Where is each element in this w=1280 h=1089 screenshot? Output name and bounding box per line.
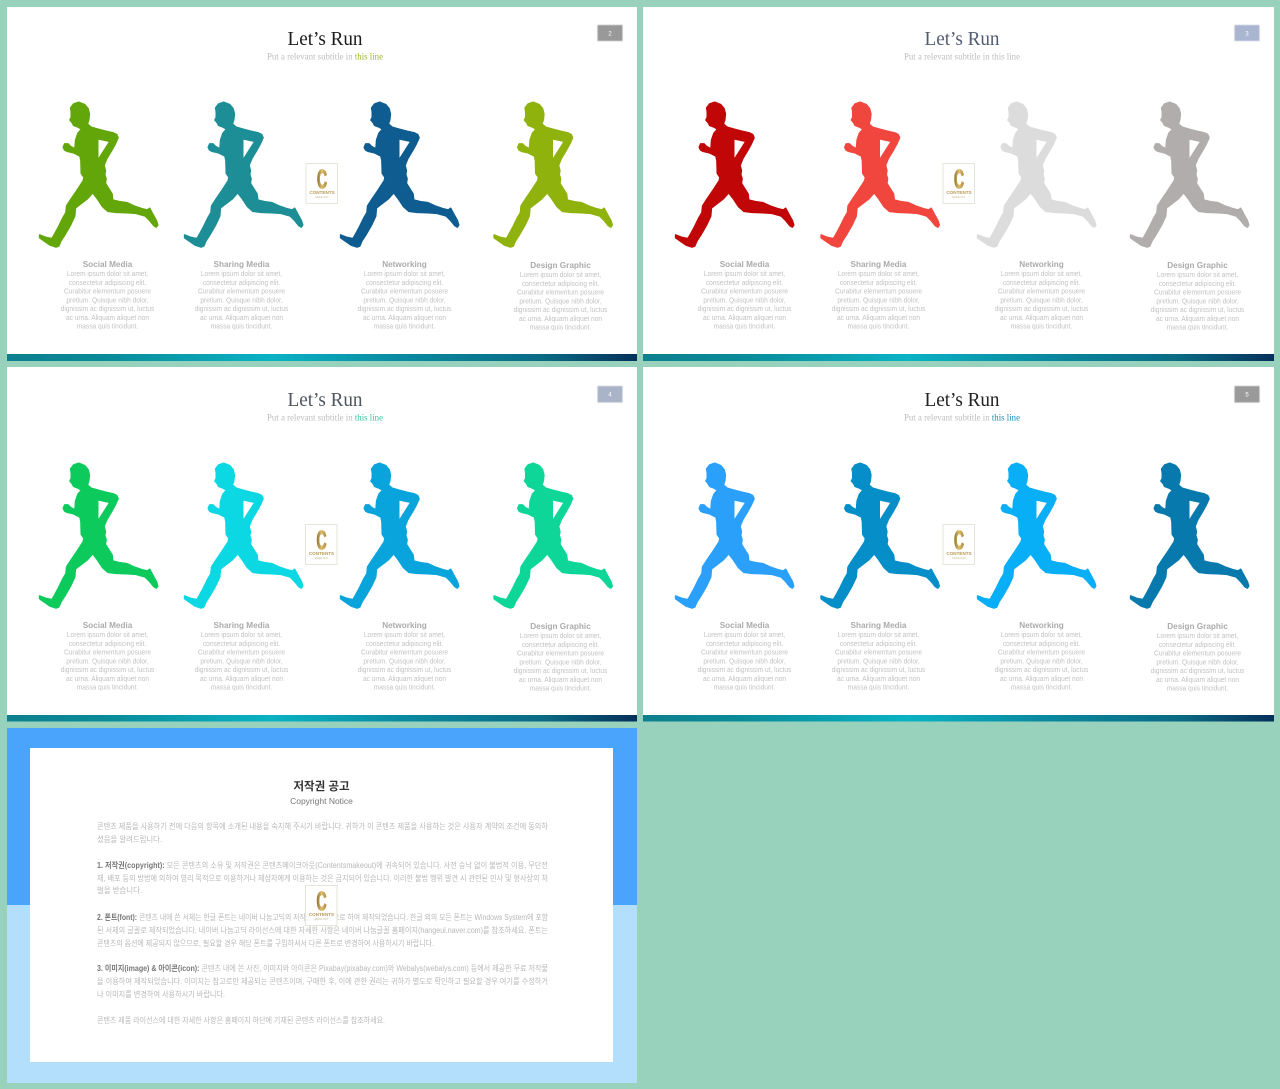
column: Design Graphic: Curabitur elementum posuere [1154, 289, 1241, 297]
logo: C [954, 164, 964, 194]
column: Sharing Media [832, 260, 926, 331]
page badge: 5 [1245, 392, 1249, 398]
logo: C [317, 164, 327, 194]
column: Design Graphic: dignissim ac dignissim ut, luctus [1151, 668, 1245, 675]
column: Sharing Media: Sharing Media [851, 621, 907, 630]
column: Social Media: pretium. Quisque nibh dolor, [66, 297, 149, 305]
column: Networking: consectetur adipiscing elit. [1003, 280, 1080, 287]
column: Social Media: massa quis tincidunt. [77, 323, 138, 331]
column: Networking: consectetur adipiscing elit. [366, 280, 443, 287]
column: Social Media: dignissim ac dignissim ut, luctus [61, 306, 155, 313]
column: Social Media: massa quis tincidunt. [714, 684, 775, 692]
column: Networking: pretium. Quisque nibh dolor, [1000, 297, 1083, 305]
column: Networking: pretium. Quisque nibh dolor, [1000, 658, 1083, 666]
column: Networking: massa quis tincidunt. [1011, 684, 1072, 692]
column: Design Graphic: pretium. Quisque nibh dolor, [1156, 298, 1239, 306]
runners [676, 102, 1249, 247]
column: Networking: Networking [1019, 260, 1064, 269]
column: Sharing Media: dignissim ac dignissim ut, luctus [195, 306, 289, 313]
column: Networking: dignissim ac dignissim ut, luctus [358, 667, 452, 674]
column: Social Media: dignissim ac dignissim ut, luctus [61, 667, 155, 674]
notice item 1 [97, 860, 548, 895]
panel: slide 3 red runners [643, 7, 1274, 361]
column: Sharing Media: Lorem ipsum dolor sit amet, [201, 271, 282, 278]
notice item 2: 콘텐츠의 옵션에 제공되지 않으므로, 필요할 경우 해당 폰트를 구입하셔서 다른 폰트로 변경하여 사용하시기 바랍니다. [97, 938, 434, 948]
column: Social Media: ac urna. Aliquam aliquet non [703, 676, 786, 683]
column: Social Media: pretium. Quisque nibh dolor, [703, 658, 786, 666]
column: Design Graphic: dignissim ac dignissim ut, luctus [1151, 307, 1245, 314]
column: Networking [995, 621, 1089, 692]
column: Design Graphic: ac urna. Aliquam aliquet non [519, 316, 602, 323]
column: Networking: Curabitur elementum posuere [998, 649, 1085, 657]
column: Networking [358, 260, 452, 331]
column: Networking: pretium. Quisque nibh dolor, [363, 297, 446, 305]
column: Sharing Media: Lorem ipsum dolor sit amet, [838, 271, 919, 278]
column: Sharing Media: ac urna. Aliquam aliquet non [837, 315, 920, 322]
column: Design Graphic: massa quis tincidunt. [530, 685, 591, 693]
panel: slide 2 green runners [7, 7, 637, 361]
column: Design Graphic: Curabitur elementum posuere [1154, 650, 1241, 658]
notice intro: 콘텐츠 제품을 사용하기 전에 다음의 항목에 소개된 내용을 숙지해 주시기 바랍니다. 귀하가 이 콘텐츠 제품을 사용하는 것은 사용자 계약의 조건에 동의하 [97, 821, 549, 831]
column: Social Media [61, 260, 155, 331]
logo [306, 524, 337, 564]
notice intro [97, 821, 549, 844]
logo: CONTENTS [309, 190, 335, 195]
notice closing line: 콘텐츠 제품 라이선스에 대한 자세한 사항은 홈페이지 하단에 기재된 콘텐츠 라이선스를 참조하세요. [97, 1015, 385, 1025]
column: Sharing Media: pretium. Quisque nibh dolor, [837, 297, 920, 305]
column: Design Graphic [514, 622, 608, 693]
notice item 3: 3. 이미지(image) & 아이콘(icon): 콘텐츠 내에 쓴 사진, 이미지와 아이콘은 Pixabay(pixabay.com)와 Webalys(webalys.com) 등에서 제공한 무료 저작물 [97, 963, 548, 973]
notice item 3: 을 이용하여 제작되었습니다. 이미지는 참고로만 제공되는 콘텐츠이며, 구매한 후, 이에 관한 권리는 귀하가 별도로 확인하고 필요할 경우 여기를 수정하거 [97, 976, 548, 986]
column: Design Graphic: consectetur adipiscing elit. [522, 642, 599, 649]
column: Social Media: Lorem ipsum dolor sit amet, [67, 632, 148, 639]
column: Design Graphic: consectetur adipiscing elit. [1159, 281, 1236, 288]
column: Sharing Media: ac urna. Aliquam aliquet non [200, 315, 283, 322]
logo: C [316, 886, 327, 916]
column: Design Graphic: Design Graphic [530, 622, 591, 631]
column: Design Graphic: ac urna. Aliquam aliquet non [1156, 677, 1239, 684]
notice item 2: 된 서체의 글꼴로 제작되었습니다. 네이버 나눔고딕 라이선스에 대한 자세한 사항은 네이버 나눔글꼴 홈페이지(hangeul.naver.com)를 참조하세요. 폰트는 [97, 925, 548, 935]
column: Social Media: dignissim ac dignissim ut, luctus [698, 667, 792, 674]
notice item 3 [97, 963, 548, 999]
column: Social Media [698, 260, 792, 331]
column: Networking: ac urna. Aliquam aliquet non [363, 315, 446, 322]
column: Sharing Media: massa quis tincidunt. [848, 684, 909, 692]
column: Networking: pretium. Quisque nibh dolor, [363, 658, 446, 666]
column: Social Media: pretium. Quisque nibh dolor, [703, 297, 786, 305]
logo [306, 886, 337, 926]
column: Design Graphic: dignissim ac dignissim ut, luctus [514, 307, 608, 314]
column: Social Media: Lorem ipsum dolor sit amet, [704, 632, 785, 639]
logo: C [954, 525, 964, 555]
column: Social Media [698, 621, 792, 692]
column: Social Media: Social Media [720, 260, 770, 269]
column: Networking: massa quis tincidunt. [1011, 323, 1072, 331]
column: Sharing Media: consectetur adipiscing elit. [203, 280, 280, 287]
column: Social Media: massa quis tincidunt. [77, 684, 138, 692]
logo: C [316, 525, 327, 555]
column: Sharing Media: Sharing Media [214, 621, 270, 630]
column: Design Graphic: consectetur adipiscing elit. [522, 281, 599, 288]
column: Design Graphic: ac urna. Aliquam aliquet non [519, 677, 602, 684]
column: Design Graphic: pretium. Quisque nibh dolor, [519, 659, 602, 667]
column: Design Graphic: dignissim ac dignissim ut, luctus [514, 668, 608, 675]
title: Let’s Run [924, 389, 1000, 411]
logo [943, 164, 974, 204]
subtitle: Put a relevant subtitle in this line [904, 412, 1020, 422]
column: Social Media: Social Media [720, 621, 770, 630]
logo: CONTENTS [946, 190, 972, 195]
column: Networking: consectetur adipiscing elit. [366, 641, 443, 648]
notice subheading: Copyright Notice [290, 796, 353, 806]
column: Design Graphic: ac urna. Aliquam aliquet non [1156, 316, 1239, 323]
column: Social Media: Lorem ipsum dolor sit amet, [704, 271, 785, 278]
column: Networking: ac urna. Aliquam aliquet non [1000, 676, 1083, 683]
column: Social Media: Lorem ipsum dolor sit amet, [67, 271, 148, 278]
column: Sharing Media: pretium. Quisque nibh dolor, [200, 658, 283, 666]
column: Social Media: ac urna. Aliquam aliquet non [703, 315, 786, 322]
column: Design Graphic: massa quis tincidunt. [530, 324, 591, 332]
column: Networking: Networking [382, 260, 427, 269]
page badge [1234, 25, 1260, 41]
runners [676, 463, 1249, 608]
column: Sharing Media: Curabitur elementum posuere [198, 649, 285, 657]
title: Let’s Run [288, 389, 362, 411]
column: Networking: Curabitur elementum posuere [361, 288, 448, 296]
column: Social Media: Curabitur elementum posuere [64, 288, 151, 296]
column: Sharing Media: ac urna. Aliquam aliquet non [837, 676, 920, 683]
column: Sharing Media: Lorem ipsum dolor sit amet, [201, 632, 282, 639]
column: Social Media: dignissim ac dignissim ut, luctus [698, 306, 792, 313]
column: Design Graphic: Design Graphic [1167, 622, 1228, 631]
page badge: 4 [608, 392, 612, 398]
column: Networking: Lorem ipsum dolor sit amet, [1001, 271, 1082, 278]
column: Sharing Media: massa quis tincidunt. [211, 323, 272, 331]
column: Networking [358, 621, 452, 692]
column: Social Media: Social Media [83, 260, 133, 269]
column: Design Graphic [1151, 261, 1245, 332]
column: Networking: ac urna. Aliquam aliquet non [363, 676, 446, 683]
notice intro: 셨음을 알려드립니다. [97, 834, 162, 844]
notice heading: 저작권 공고 [293, 779, 350, 793]
column: Social Media: consectetur adipiscing elit. [69, 280, 146, 287]
panel: copyright notice [7, 728, 637, 1083]
column: Social Media: Social Media [83, 621, 133, 630]
column: Design Graphic: Lorem ipsum dolor sit amet, [1157, 633, 1238, 640]
panel: slide 4 green and cyan runners [7, 367, 637, 722]
column: Social Media: pretium. Quisque nibh dolor, [66, 658, 149, 666]
column: Networking: consectetur adipiscing elit. [1003, 641, 1080, 648]
column: Sharing Media: consectetur adipiscing elit. [840, 641, 917, 648]
column: Networking: dignissim ac dignissim ut, luctus [995, 306, 1089, 313]
logo: CONTENTS [309, 551, 334, 556]
column: Design Graphic: Lorem ipsum dolor sit amet, [1157, 272, 1238, 279]
subtitle: Put a relevant subtitle in this line [267, 412, 383, 422]
column: Networking: dignissim ac dignissim ut, luctus [995, 667, 1089, 674]
column: Social Media: ac urna. Aliquam aliquet non [66, 315, 149, 322]
column: Social Media: Curabitur elementum posuere [64, 649, 151, 657]
column: Design Graphic: massa quis tincidunt. [1167, 685, 1228, 693]
title: Let’s Run [924, 28, 1000, 50]
page badge [1234, 386, 1260, 402]
page badge [598, 386, 622, 402]
column: Design Graphic: Lorem ipsum dolor sit amet, [520, 633, 601, 640]
logo [306, 164, 338, 204]
column: Networking: Lorem ipsum dolor sit amet, [364, 271, 445, 278]
column: Sharing Media: Sharing Media [851, 260, 907, 269]
notice item 1: 1. 저작권(copyright): 모든 콘텐츠의 소유 및 저작권은 콘텐츠메이크아웃(Contentsmakeout)에 귀속되어 있습니다. 사전 승낙 없이 불법적 이용, 무단전 [97, 860, 548, 870]
column: Social Media [61, 621, 155, 692]
notice item 3: 나 이미지를 변경하여 사용하시기 바랍니다. [97, 989, 225, 999]
column: Social Media: consectetur adipiscing elit. [706, 280, 783, 287]
column: Networking: Networking [382, 621, 427, 630]
column: Design Graphic [1151, 622, 1245, 693]
column: Design Graphic: pretium. Quisque nibh dolor, [519, 298, 602, 306]
logo: MAKE OUT [315, 917, 329, 921]
column: Sharing Media: consectetur adipiscing elit. [203, 641, 280, 648]
column: Design Graphic: Lorem ipsum dolor sit amet, [520, 272, 601, 279]
logo: CONTENTS [309, 912, 334, 917]
column: Sharing Media: pretium. Quisque nibh dolor, [200, 297, 283, 305]
notice item 1: 벌을 받습니다. [97, 885, 142, 895]
column: Networking: Lorem ipsum dolor sit amet, [1001, 632, 1082, 639]
column: Social Media: ac urna. Aliquam aliquet non [66, 676, 149, 683]
column: Sharing Media [195, 621, 289, 692]
column: Networking: Curabitur elementum posuere [361, 649, 448, 657]
column: Design Graphic: consectetur adipiscing elit. [1159, 642, 1236, 649]
notice item 2: 2. 폰트(font): 콘텐츠 내에 쓴 서체는 한글 폰트는 네이버 나눔고딕의 저작물을 기반으로 하여 제작되었습니다. 한글 외의 모든 폰트는 Windows System에 포함 [97, 912, 549, 922]
column: Networking: Curabitur elementum posuere [998, 288, 1085, 296]
logo: MAKE OUT [315, 195, 329, 199]
column: Sharing Media: massa quis tincidunt. [848, 323, 909, 331]
column: Sharing Media: Curabitur elementum posuere [835, 288, 922, 296]
logo: MAKE OUT [315, 556, 329, 560]
column: Social Media: massa quis tincidunt. [714, 323, 775, 331]
column: Design Graphic: Design Graphic [530, 261, 591, 270]
logo: MAKE OUT [952, 556, 966, 560]
column: Sharing Media: dignissim ac dignissim ut, luctus [832, 667, 926, 674]
notice item 2 [97, 912, 549, 948]
column: Social Media: consectetur adipiscing elit. [69, 641, 146, 648]
logo: MAKE OUT [952, 195, 966, 199]
column: Sharing Media [195, 260, 289, 331]
column: Networking: dignissim ac dignissim ut, luctus [358, 306, 452, 313]
column: Networking: massa quis tincidunt. [374, 323, 435, 331]
title: Let’s Run [288, 28, 362, 50]
column: Design Graphic: Curabitur elementum posuere [517, 289, 604, 297]
column: Design Graphic: Curabitur elementum posuere [517, 650, 604, 658]
column: Sharing Media: ac urna. Aliquam aliquet non [200, 676, 283, 683]
column: Networking: Lorem ipsum dolor sit amet, [364, 632, 445, 639]
column: Design Graphic: massa quis tincidunt. [1167, 324, 1228, 332]
column: Sharing Media: dignissim ac dignissim ut, luctus [832, 306, 926, 313]
logo: CONTENTS [946, 551, 972, 556]
column: Sharing Media: dignissim ac dignissim ut, luctus [195, 667, 289, 674]
page badge: 3 [1245, 32, 1249, 38]
column: Sharing Media [832, 621, 926, 692]
column: Sharing Media: Curabitur elementum posuere [198, 288, 285, 296]
subtitle: Put a relevant subtitle in this line [267, 52, 383, 62]
column: Social Media: Curabitur elementum posuere [701, 649, 788, 657]
column: Social Media: Curabitur elementum posuere [701, 288, 788, 296]
column: Sharing Media: Curabitur elementum posuere [835, 649, 922, 657]
subtitle: Put a relevant subtitle in this line [904, 52, 1020, 62]
column: Design Graphic [514, 261, 608, 332]
column: Sharing Media: consectetur adipiscing elit. [840, 280, 917, 287]
column: Sharing Media: Sharing Media [214, 260, 270, 269]
column: Design Graphic: pretium. Quisque nibh dolor, [1156, 659, 1239, 667]
page badge [598, 25, 622, 41]
column: Sharing Media: massa quis tincidunt. [211, 684, 272, 692]
notice item 1: 재, 배포 등의 방법에 의하여 영리 목적으로 이용하거나 제삼자에게 이용하는 것은 금지되어 있습니다. 이러한 불법 행위 발견 시 관련된 민사 및 형사상의 처 [97, 873, 548, 883]
column: Social Media: consectetur adipiscing elit. [706, 641, 783, 648]
column: Networking: massa quis tincidunt. [374, 684, 435, 692]
column: Sharing Media: pretium. Quisque nibh dolor, [837, 658, 920, 666]
column: Networking: ac urna. Aliquam aliquet non [1000, 315, 1083, 322]
column: Sharing Media: Lorem ipsum dolor sit amet, [838, 632, 919, 639]
page badge: 2 [608, 32, 612, 38]
panel: slide 5 blue runners [643, 367, 1274, 722]
runners [40, 102, 612, 247]
runners [40, 463, 612, 608]
column: Networking [995, 260, 1089, 331]
column: Networking: Networking [1019, 621, 1064, 630]
column: Design Graphic: Design Graphic [1167, 261, 1228, 270]
logo [943, 524, 974, 564]
